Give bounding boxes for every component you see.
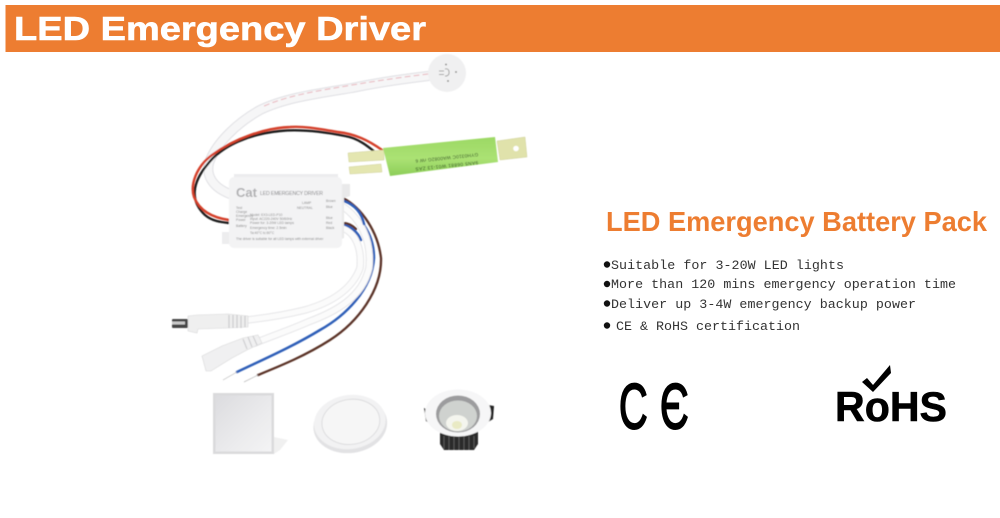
output leads: white cables, blue and brown wires [223, 198, 381, 382]
driver specs: The driver is suitable for all LED lamps with external driver [236, 237, 324, 241]
CE mark [619, 372, 689, 443]
battery label text [415, 151, 478, 172]
driver specs: Ta:40°C tc:60°C [250, 231, 275, 235]
driver specs [236, 199, 336, 241]
driver logo: Cat [236, 185, 258, 200]
ribbon cable to sensor [208, 74, 428, 194]
icon: square LED panel [213, 393, 288, 454]
feature list [604, 259, 956, 335]
section heading: LED Emergency Battery Pack [606, 206, 987, 237]
battery label text: GYH0310C WA0082G rW 6 [415, 151, 478, 164]
driver specs: Brown [326, 199, 336, 203]
RoHS mark [835, 365, 947, 430]
DC plug connector [172, 314, 248, 333]
feature: operation time: More than 120 mins emergency operation time [611, 278, 956, 293]
icon: round LED panel [309, 390, 391, 458]
driver specs: Input: AC220-240V 50/60Hz [250, 217, 293, 221]
RoHS label: RoHS [835, 383, 947, 430]
product photo: emergency driver with battery and sensor [172, 54, 527, 382]
driver specs: Model: EX3-LED-P10 [250, 213, 283, 217]
battery pack [348, 137, 527, 176]
driver specs: Emergency [236, 214, 253, 218]
DC socket connector [202, 335, 262, 371]
driver specs: Emergency time: 2.5min [250, 226, 287, 230]
title banner [6, 5, 1000, 52]
driver specs: Charge [236, 210, 247, 214]
icon: COB downlight [424, 390, 494, 450]
feature: certification: CE & RoHS certification [616, 320, 800, 335]
battery wires [193, 127, 382, 223]
driver specs: Red [326, 221, 332, 225]
icon: check mark [862, 365, 891, 392]
driver box [222, 174, 350, 248]
driver specs: Power for: 3-20W LED lamps [250, 221, 294, 225]
driver heading: LED EMERGENCY DRIVER [260, 191, 323, 197]
title: LED Emergency Driver [14, 10, 426, 47]
driver specs: Test [236, 206, 242, 210]
sensor disc [428, 54, 466, 92]
driver specs: LAMP [302, 201, 312, 205]
feature: backup power: Deliver up 3-4W emergency backup power [611, 298, 916, 313]
CE mark: Є [660, 372, 689, 443]
battery label text: 9AN5 06881 W01-13 ZAS [415, 159, 478, 172]
driver specs: Battery [236, 224, 247, 228]
driver specs: Blue [326, 216, 333, 220]
driver specs: Power [236, 218, 246, 222]
light fixtures row [213, 390, 494, 458]
feature: suitable lights: Suitable for 3-20W LED lights [611, 259, 844, 274]
driver specs: NEUTRAL [297, 206, 313, 210]
CE mark: C [619, 372, 648, 443]
driver specs: Black [326, 226, 335, 230]
driver specs: Blue [326, 205, 333, 209]
